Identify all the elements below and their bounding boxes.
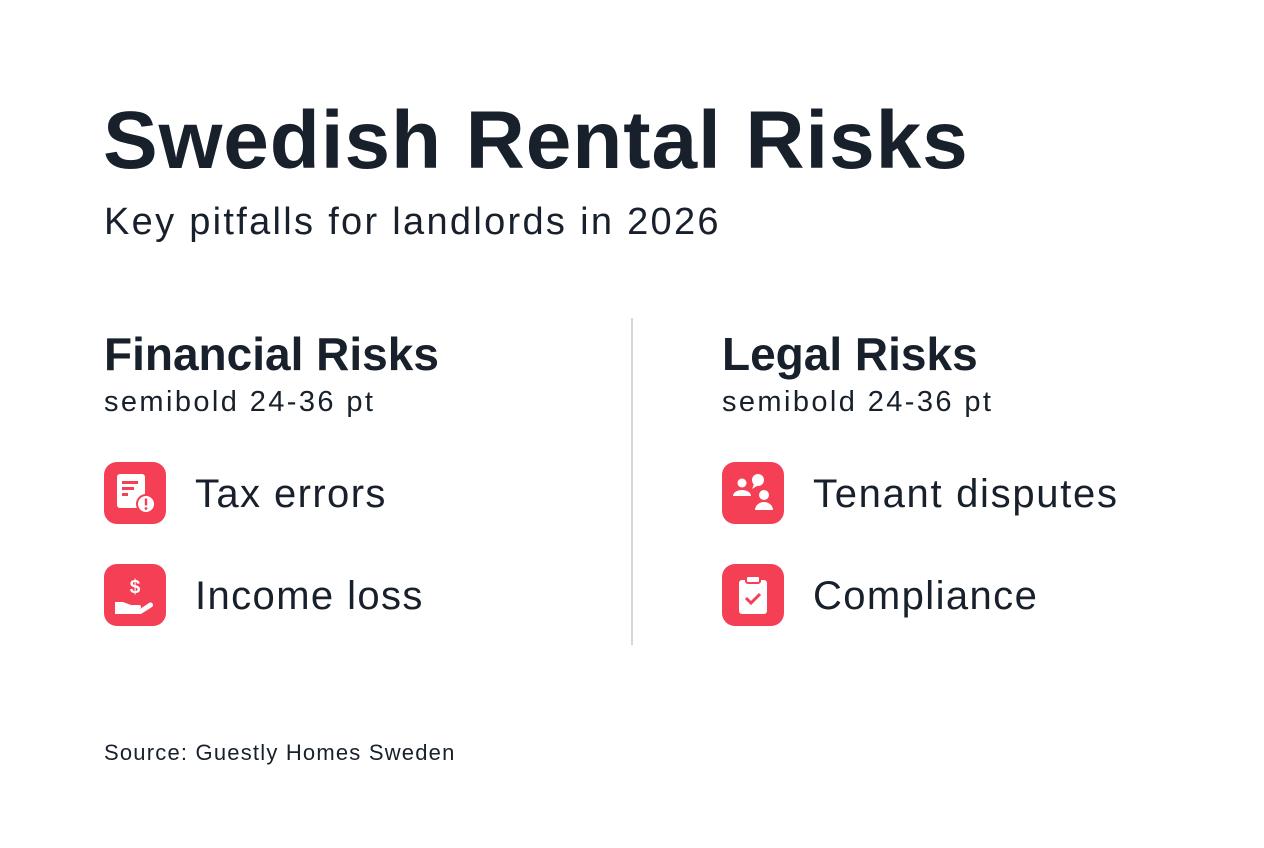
panel: legal risks (722, 328, 1119, 626)
text: income loss: Income loss (195, 574, 424, 618)
text: compliance: Compliance (813, 574, 1038, 618)
icon: income hand: $ (130, 577, 141, 598)
source: Source: Guestly Homes Sweden (104, 740, 456, 765)
divider (631, 318, 633, 645)
heading: legal: Legal Risks (722, 328, 978, 380)
subtitle: Key pitfalls for landlords in 2026 (104, 201, 721, 243)
note: legal: semibold 24-36 pt (722, 386, 993, 418)
icon: people dispute (722, 462, 784, 524)
heading: financial: Financial Risks (104, 328, 439, 380)
icon: income hand (104, 564, 166, 626)
icon: tax document (104, 462, 166, 524)
icon: clipboard check (722, 564, 784, 626)
panel: financial risks (104, 328, 439, 626)
note: financial: semibold 24-36 pt (104, 386, 375, 418)
text: tenant disputes: Tenant disputes (813, 472, 1119, 516)
title: Swedish Rental Risks (103, 95, 969, 186)
text: tax errors: Tax errors (195, 472, 387, 516)
